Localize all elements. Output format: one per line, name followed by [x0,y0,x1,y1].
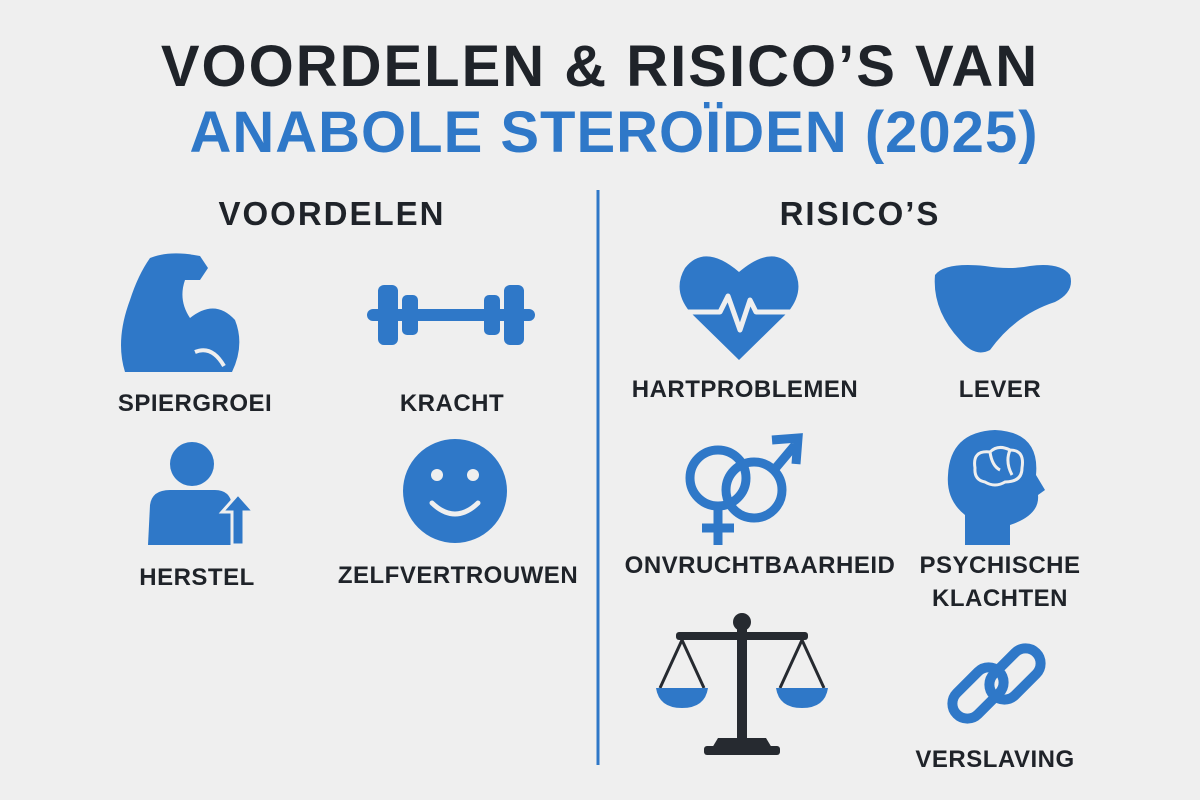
label: hartproblemen: HARTPROBLEMEN [632,376,858,403]
heading: risico's: RISICO’S [780,195,940,232]
title: VOORDELEN & RISICO’S VAN [161,34,1039,99]
label: lever: LEVER [959,376,1041,403]
label: spiergroei: SPIERGROEI [118,390,272,417]
icon: smiley [403,439,507,543]
label: psychische klachten: PSYCHISCHE [919,552,1081,579]
icon: chain [946,642,1047,725]
icon: liver [935,265,1071,352]
label: onvruchtbaarheid: ONVRUCHTBAARHEID [625,552,895,579]
label: zelfvertrouwen: ZELFVERTROUWEN [338,562,578,589]
label: verslaving: VERSLAVING [915,746,1075,773]
icon: heart [680,256,798,360]
title: ANABOLE STEROÏDEN (2025) [189,100,1039,165]
label: psychische klachten: KLACHTEN [932,585,1068,612]
title [161,34,1039,165]
label: psychische klachten [919,552,1081,612]
icon: muscle arm [121,253,239,372]
heading: voordelen: VOORDELEN [218,195,446,232]
icon: dumbbell [367,285,535,345]
label: herstel: HERSTEL [139,564,255,591]
icon: gender symbols [690,438,798,545]
icon: head with brain [948,430,1045,545]
icon: person with arrow [148,442,254,545]
icon: scales of justice [656,613,828,755]
label: kracht: KRACHT [400,390,504,417]
